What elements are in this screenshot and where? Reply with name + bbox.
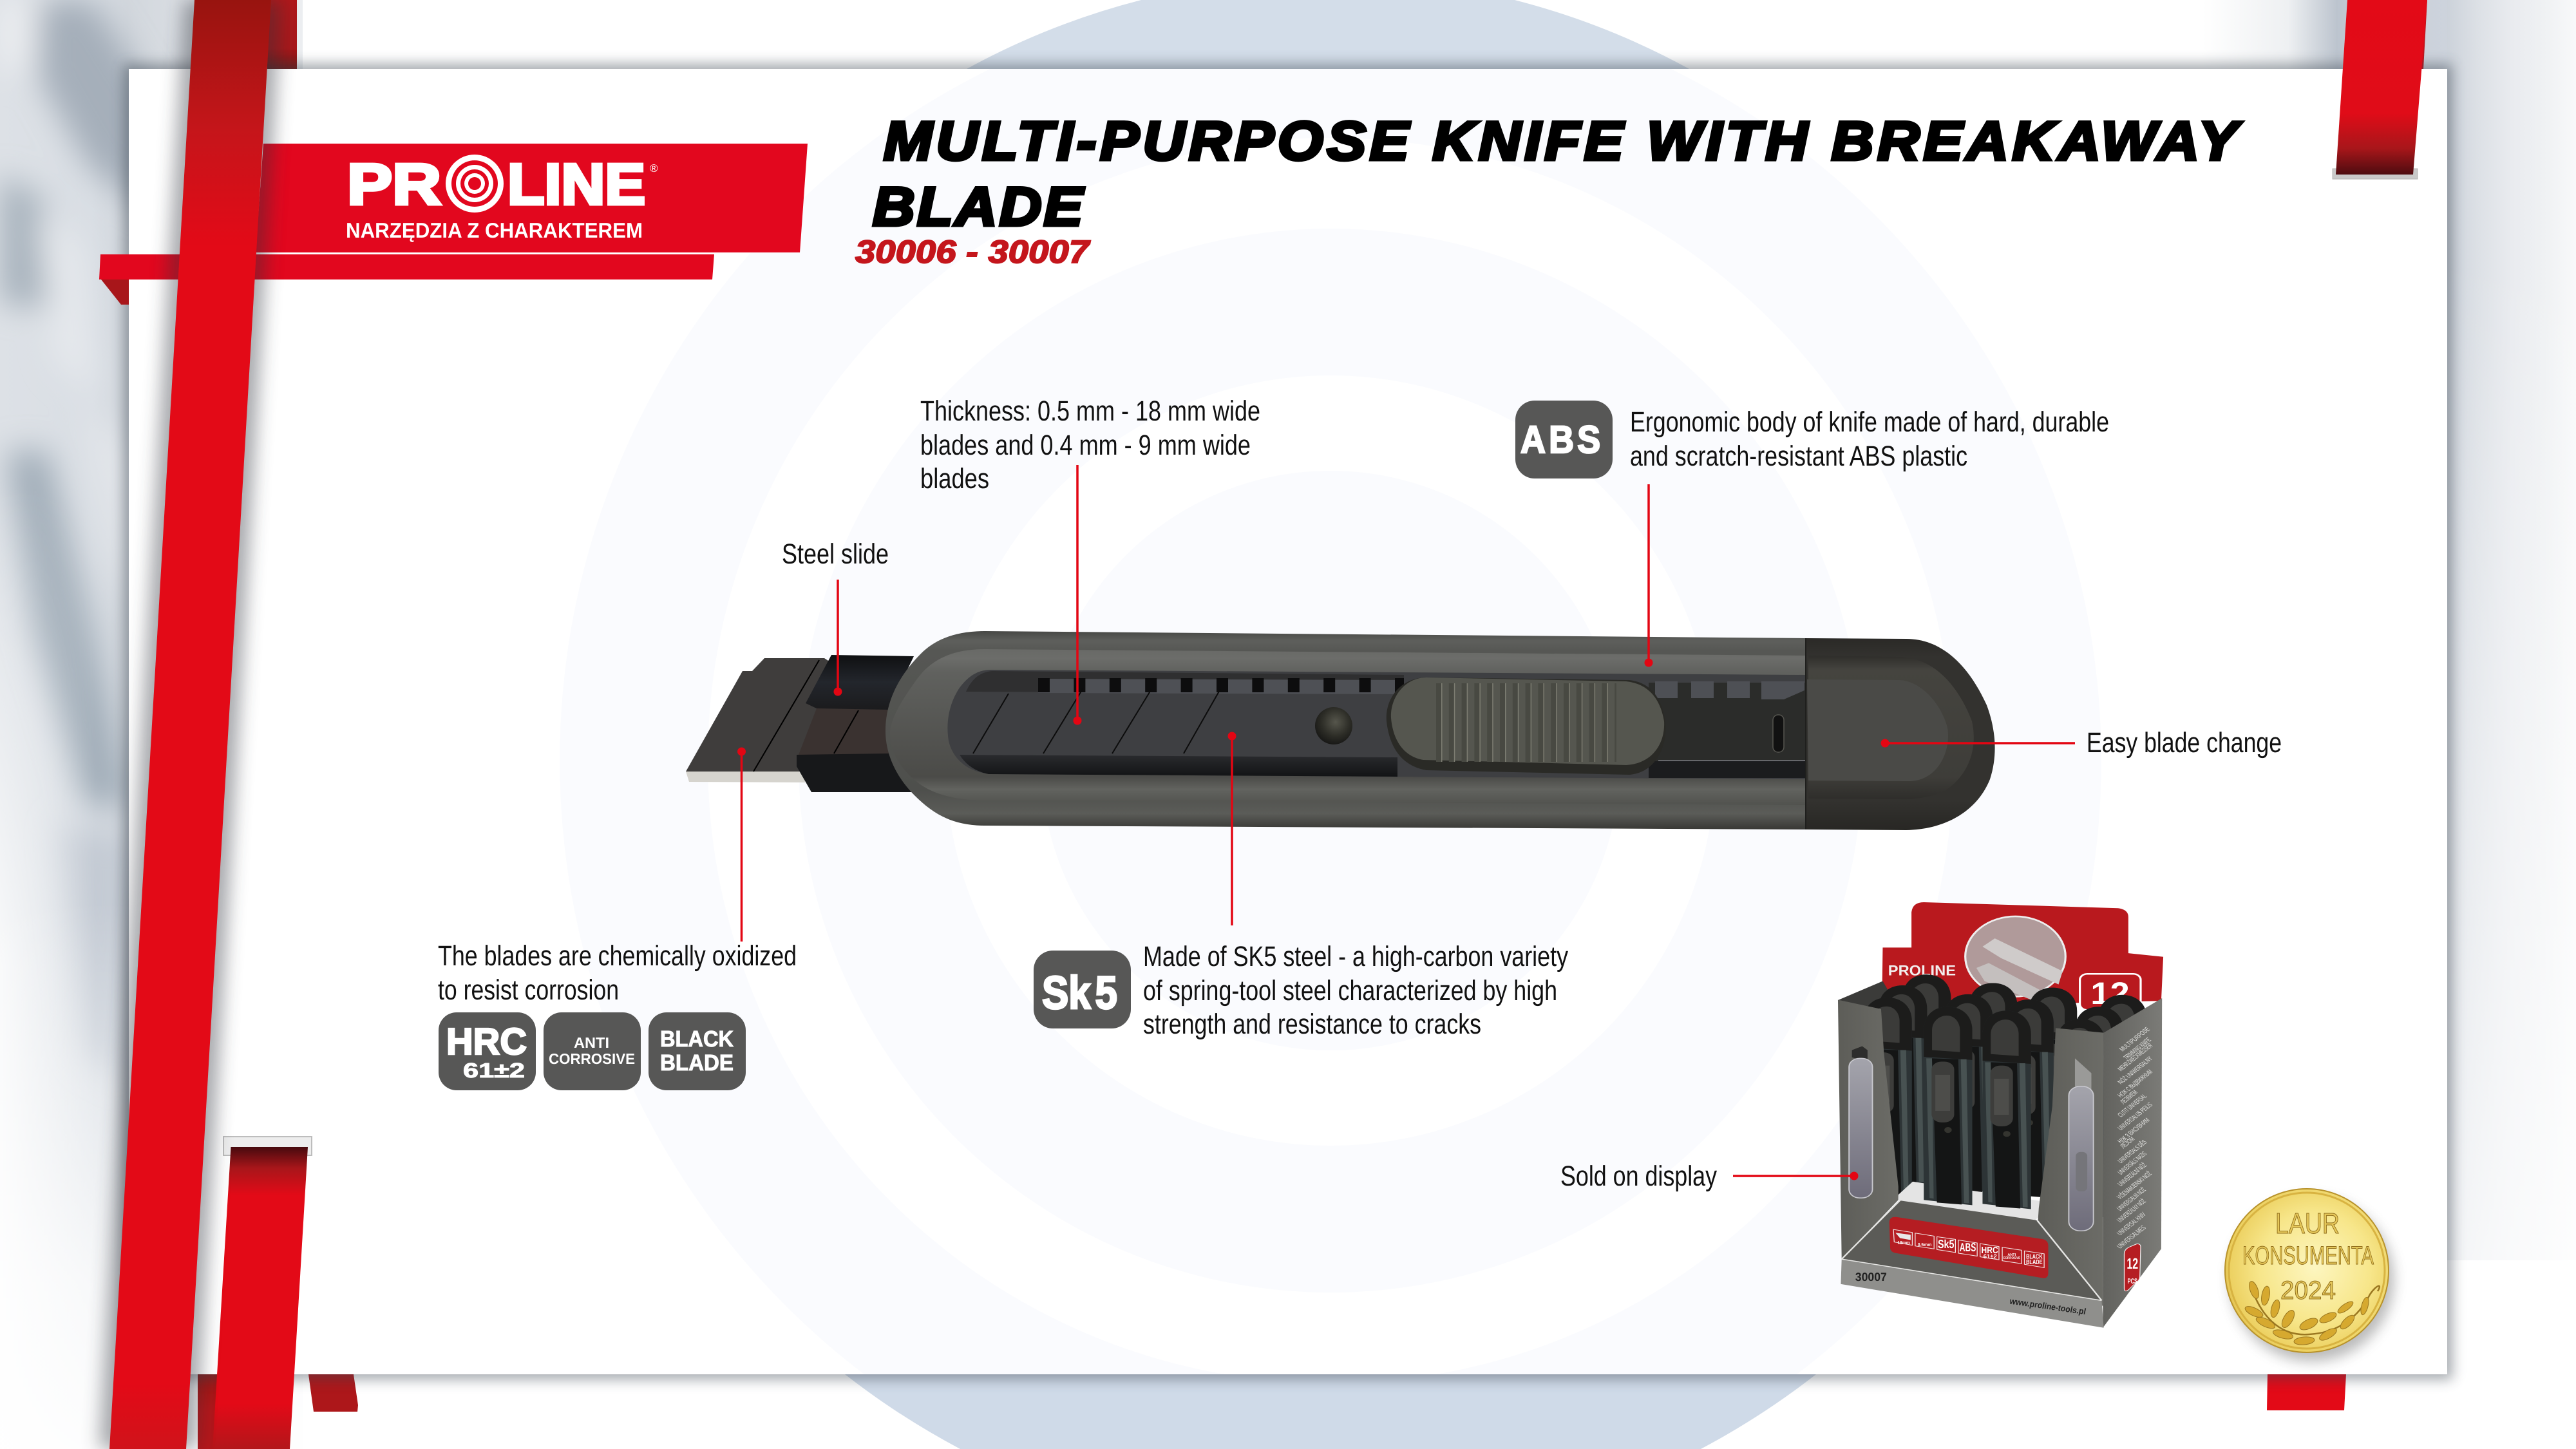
box side text: UNIVERSALUS PEILIS	[2116, 1101, 2154, 1132]
box side text: НОЖ С ВЫДВИЖНЫМ	[2116, 1068, 2154, 1099]
box side text: UNIVERSĀLS NAZIS	[2116, 1150, 2148, 1176]
badge: anti corrosive	[544, 1012, 641, 1090]
box side text: UNIVERSALMES	[2116, 1224, 2148, 1250]
box mini knife right	[2069, 1058, 2094, 1231]
logo wordmark	[346, 153, 658, 242]
title	[873, 111, 2242, 238]
box side text	[2115, 1026, 2154, 1250]
callout: SK5 steel: Made of SK5 steel - a high-carbon variety	[1143, 941, 1568, 972]
blade window	[947, 670, 1806, 779]
ribbon: lower left	[213, 1137, 312, 1449]
badge: anti corrosive: ANTI	[574, 1034, 609, 1051]
box back panel: PROLINE	[1888, 962, 1956, 978]
box front base	[1842, 1200, 2101, 1300]
ribbon: main left	[99, 0, 281, 1449]
badge: black blade	[649, 1012, 746, 1090]
badge: ABS	[1515, 401, 1613, 478]
box side text: VIŠENAMJENSKI NOŽ	[2115, 1170, 2154, 1201]
knives: front row	[1924, 1007, 2031, 1209]
callout: thickness: blades	[920, 463, 989, 495]
badge: black blade: BLACK	[660, 1027, 734, 1052]
box website: www.proline-tools.pl	[2009, 1296, 2087, 1316]
box 12 pcs tag: PCS	[2128, 1277, 2137, 1285]
box side text: UNIVERZÁLNÍ NŮŽ	[2116, 1161, 2148, 1188]
box side text: UNIVERSALS DĒS	[2116, 1139, 2148, 1164]
box mini knife left	[1849, 1046, 1873, 1198]
badge: HRC	[439, 1012, 536, 1090]
box product code: 30007	[1855, 1270, 1887, 1283]
medal laurel	[2244, 1280, 2380, 1345]
box feature label: BLACK	[2026, 1253, 2043, 1260]
badge: ABS: ABS	[1520, 418, 1600, 461]
knives: back row	[1864, 974, 2147, 1217]
callout: oxidized blades	[438, 747, 797, 1006]
box feature label: BLADE	[2026, 1258, 2043, 1265]
callout: oxidized blades: to resist corrosion	[438, 974, 619, 1006]
badge: Sk5: Sk5	[1042, 967, 1117, 1019]
rivet	[1315, 707, 1352, 744]
box side text: NÓŻ UNIWERSALNY	[2116, 1055, 2154, 1086]
panel: logo banner	[99, 144, 808, 305]
callout: steel slide	[782, 538, 889, 696]
box side text: ЛЕЗОМ	[2119, 1135, 2137, 1150]
callout: thickness	[920, 395, 1260, 725]
box feature label: Sk5	[1938, 1237, 1954, 1251]
box 12 pcs tag: 12	[2126, 1255, 2138, 1272]
product codes: 30006 - 30007	[855, 234, 1090, 270]
callout: sold on display: Sold on display	[1560, 1160, 1717, 1192]
box feature label: ABS	[1960, 1240, 1976, 1254]
handle body	[886, 631, 1806, 829]
box side text: UNIVERSALNI NOŽ	[2115, 1186, 2148, 1212]
logo wordmark: PR	[347, 153, 441, 217]
slider	[1387, 677, 1666, 775]
box side text: ЛЕЗВИЕМ	[2119, 1089, 2139, 1106]
callout: thickness: blades and 0.4 mm - 9 mm wide	[920, 430, 1251, 461]
blade	[686, 655, 914, 792]
background circle: top arc	[967, 0, 1689, 69]
badge: black blade: BLADE	[660, 1050, 734, 1075]
medal text	[2242, 1207, 2374, 1305]
callout: easy blade change: Easy blade change	[2087, 727, 2282, 759]
callout: SK5 steel	[1034, 732, 1568, 1040]
box feature label: ANTI	[2007, 1253, 2016, 1257]
medal text: KONSUMENTA	[2242, 1242, 2374, 1270]
box right post	[2038, 1028, 2104, 1307]
title: BLADE	[873, 176, 1084, 238]
logo wordmark: NARZĘDZIA Z CHARAKTEREM	[346, 218, 643, 242]
concentric rings	[560, 69, 2101, 1374]
box feature label: 18mm	[1897, 1240, 1910, 1245]
callout: abs body: Ergonomic body of knife made of hard, durable	[1630, 406, 2109, 438]
medal text: LAUR	[2275, 1207, 2340, 1240]
rear plate	[1649, 683, 1806, 778]
top rail	[966, 671, 1404, 694]
ribbon: top right	[2333, 0, 2427, 179]
callout: oxidized blades: The blades are chemically oxidized	[438, 940, 797, 972]
knife illustration	[686, 631, 1995, 830]
callout: abs body: and scratch-resistant ABS plastic	[1630, 440, 1967, 472]
box feature label: CORROSIVE	[2003, 1256, 2020, 1260]
badge: Sk5	[1034, 951, 1131, 1028]
box feature label	[1889, 1217, 2049, 1278]
logo wordmark: ®	[650, 162, 658, 175]
badge: anti corrosive: CORROSIVE	[549, 1050, 635, 1067]
badge: HRC: HRC	[446, 1021, 527, 1063]
box 12 pcs tag	[2125, 1244, 2141, 1291]
box side text: UNIVERSAL KNIV	[2116, 1211, 2148, 1237]
box feature label: 61±2	[1984, 1253, 1997, 1260]
callout: abs body	[1515, 401, 2109, 667]
title: MULTI-PURPOSE KNIFE WITH BREAKAWAY	[884, 111, 2242, 172]
box side text: MEHRZWECKMESSER	[2116, 1042, 2154, 1073]
display box	[1838, 902, 2163, 1328]
box feature label: 0.5mm	[1918, 1242, 1931, 1247]
box left post	[1838, 1000, 1899, 1259]
bottom rail	[960, 755, 1397, 777]
box side text: CUTIT UNIVERSAL	[2116, 1093, 2148, 1119]
badge: HRC: 61±2	[463, 1059, 525, 1082]
box side panel	[2103, 998, 2162, 1328]
callout: sold on display	[1560, 1160, 1859, 1192]
box side text: НІЖ З ВИСУВНИМ	[2116, 1117, 2152, 1145]
background circle: bottom arc	[845, 1374, 1816, 1449]
end cap	[1806, 638, 1995, 830]
box floor	[1899, 1182, 2042, 1221]
box back panel	[1839, 902, 2163, 1014]
callout: SK5 steel: of spring-tool steel characterized by high	[1143, 975, 1557, 1007]
callout: steel slide: Steel slide	[782, 538, 889, 570]
score lines	[973, 689, 1220, 753]
box back panel: 12	[2090, 976, 2130, 1011]
callout: thickness: Thickness: 0.5 mm - 18 mm wide	[920, 395, 1260, 427]
box side text: UNIVERZÁLNY NÔŽ	[2115, 1198, 2148, 1224]
logo wordmark: LINE	[507, 153, 645, 217]
box side text: TRIMMING KNIFE	[2122, 1036, 2153, 1061]
box feature label: HRC	[1982, 1245, 1998, 1255]
callout: SK5 steel: strength and resistance to cracks	[1143, 1009, 1481, 1040]
box side text: MULTIPURPOSE	[2118, 1026, 2152, 1053]
medal text: 2024	[2280, 1276, 2336, 1305]
medal	[2225, 1189, 2394, 1361]
callout: easy blade change	[1880, 727, 2282, 759]
